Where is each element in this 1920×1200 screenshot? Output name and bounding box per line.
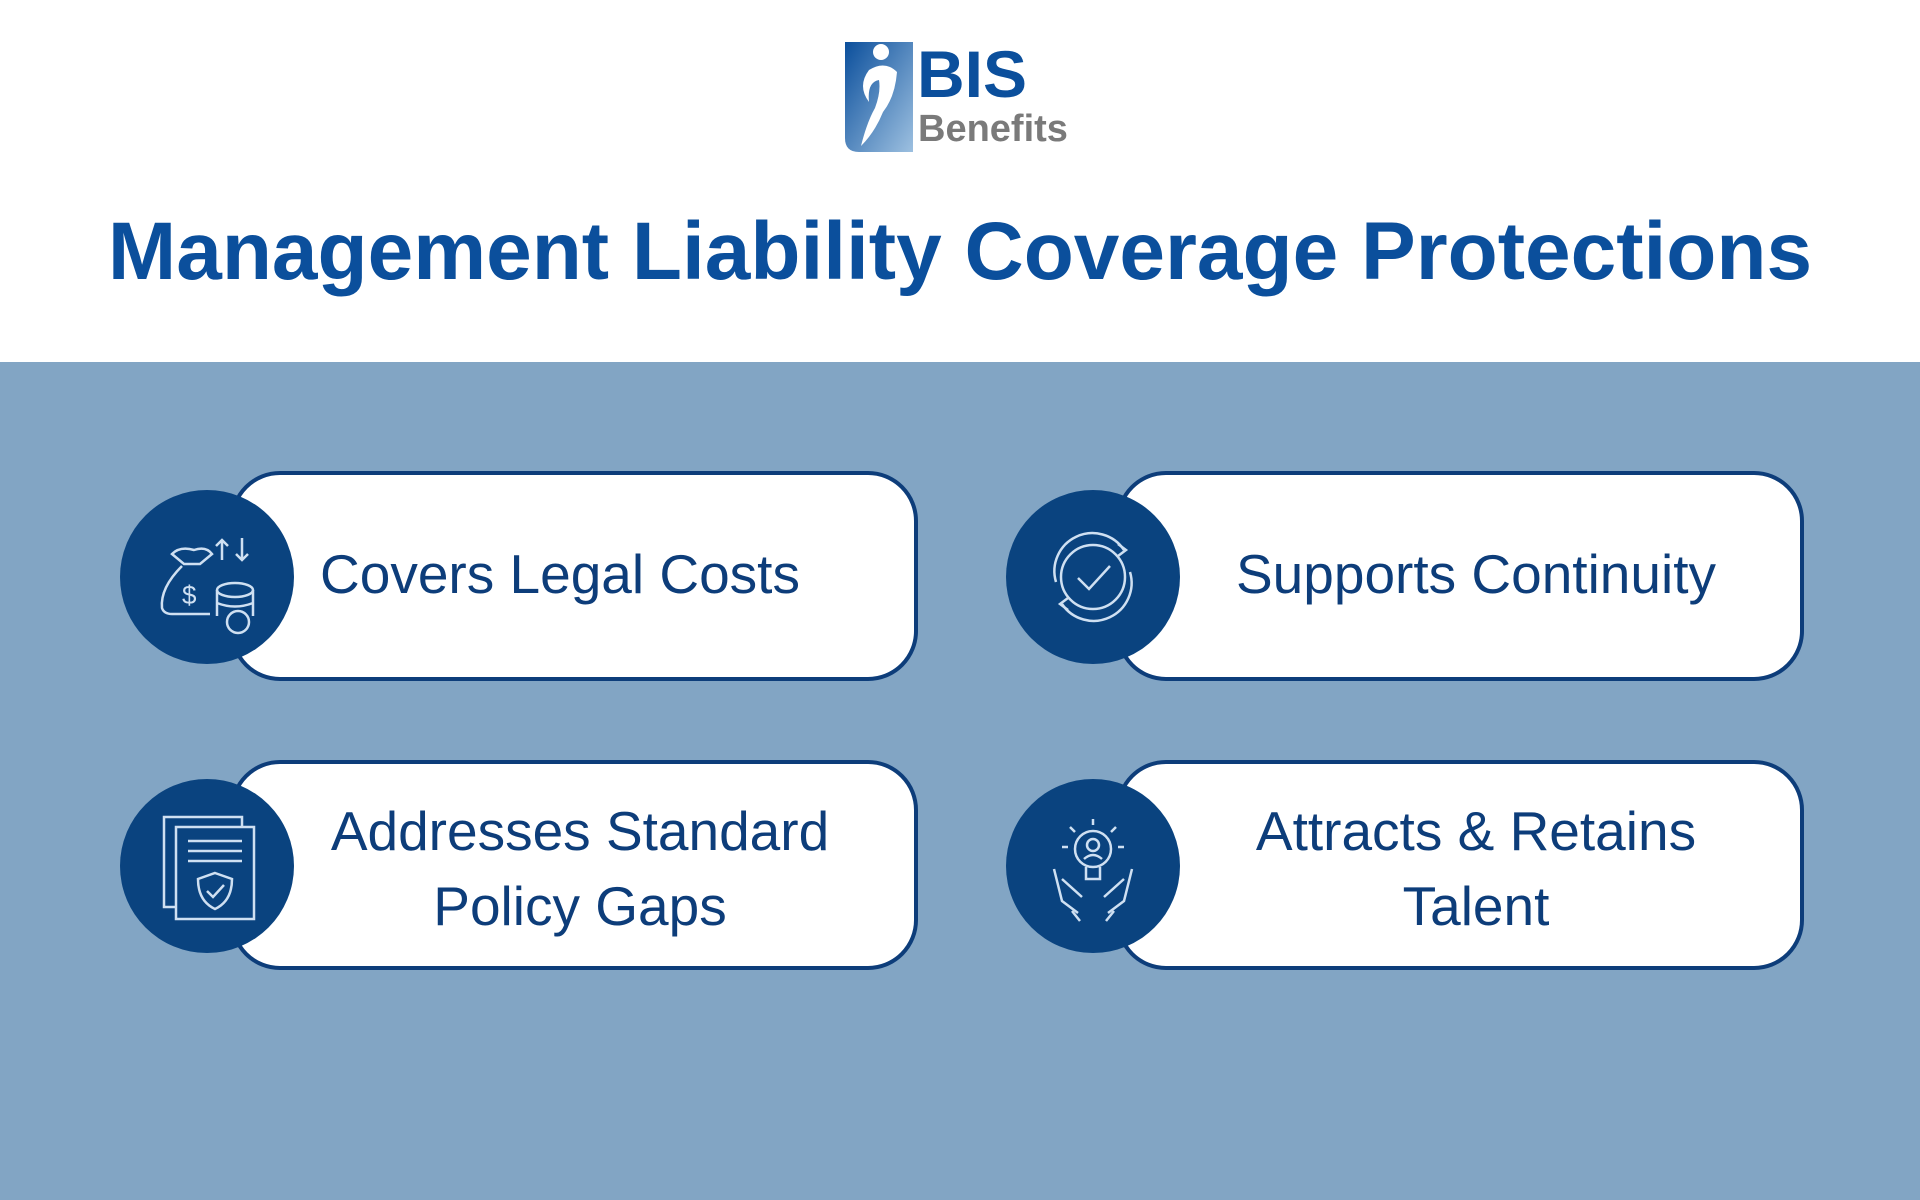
icon: document shield: [120, 779, 294, 953]
icon: hands with bulb: [1006, 779, 1180, 953]
card: supports continuity: [1006, 471, 1804, 681]
text: Supports Continuity: [1236, 543, 1716, 605]
text: Policy Gaps: [433, 875, 727, 937]
icon: cycle check: [1006, 490, 1180, 664]
logo: BIS: [917, 37, 1027, 111]
text: [331, 800, 829, 937]
logo: [845, 37, 1068, 152]
card: policy gaps: [120, 760, 918, 970]
logo: Benefits: [918, 108, 1068, 150]
text: Addresses Standard: [331, 800, 829, 862]
title: Management Liability Coverage Protections: [108, 206, 1812, 297]
card: talent: [1006, 760, 1804, 970]
icon: money bag: $: [182, 580, 197, 610]
icon: money bag: [120, 490, 294, 664]
text: Covers Legal Costs: [320, 543, 800, 605]
card: covers legal costs: [120, 471, 918, 681]
text: Talent: [1403, 875, 1549, 937]
text: Attracts & Retains: [1256, 800, 1696, 862]
text: [1256, 800, 1696, 937]
